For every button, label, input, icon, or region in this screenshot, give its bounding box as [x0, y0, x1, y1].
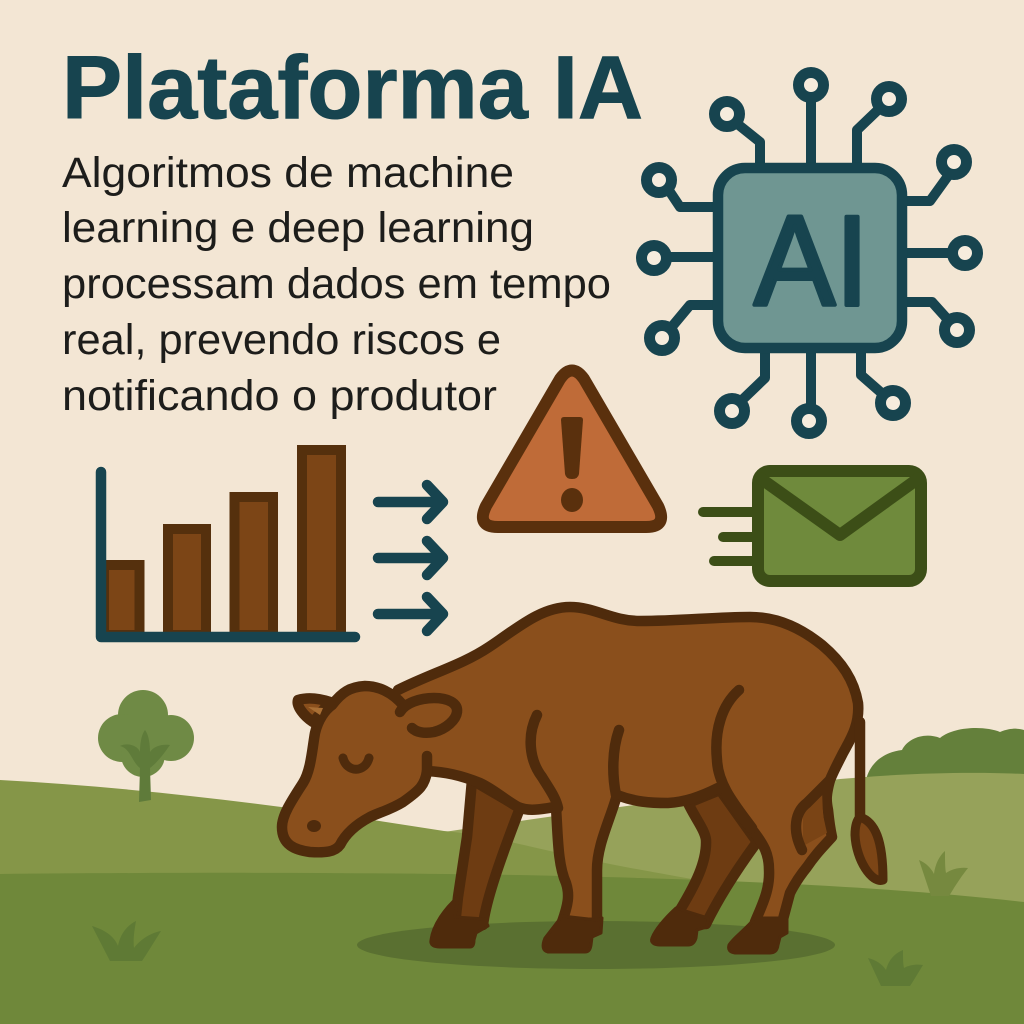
- envelope flap: [760, 478, 919, 535]
- grass tuft: bottom right: [868, 950, 923, 986]
- grass tuft: bottom left: [92, 921, 161, 961]
- cow body and head: [282, 607, 858, 923]
- description text: [62, 149, 611, 420]
- chip circuit nodes: [642, 72, 978, 434]
- olive hill left: [0, 780, 760, 920]
- chart axes: [101, 472, 355, 637]
- hind leg dark patch: [803, 790, 827, 846]
- tail: [855, 722, 865, 816]
- far hind leg: [674, 790, 757, 924]
- ground: [0, 873, 1024, 1024]
- bar chart: [101, 450, 355, 637]
- arrow middle: [378, 541, 443, 575]
- description text: notificando o produtor: [62, 372, 497, 420]
- envelope body: [758, 471, 921, 581]
- description text: processam dados em tempo: [62, 260, 611, 308]
- description text: learning e deep learning: [62, 204, 534, 252]
- triangle: [483, 370, 661, 527]
- far hind hoof: [652, 908, 708, 945]
- near front hoof: [543, 916, 602, 952]
- grass tuft: right hill: [919, 851, 968, 896]
- left ear: [298, 698, 330, 722]
- bars: [104, 450, 341, 635]
- chip body: [718, 168, 902, 348]
- nostril: [307, 820, 321, 832]
- description text: Algoritmos de machine: [62, 149, 514, 197]
- near hind hoof: [729, 918, 787, 953]
- icon: envelope: [703, 471, 921, 581]
- speed lines: [703, 512, 755, 561]
- chip circuit traces: [666, 97, 953, 409]
- arrows: [378, 485, 443, 631]
- far front hoof: [431, 897, 488, 947]
- tree: [98, 690, 194, 802]
- title: Plataforma IA: [62, 37, 643, 137]
- exclamation bar: [561, 417, 583, 479]
- far front leg: [455, 780, 520, 925]
- tree crown: [98, 690, 194, 777]
- icon: AI chip: [642, 72, 978, 434]
- light hill right: [444, 773, 1024, 920]
- inner left ear: [308, 707, 323, 715]
- exclamation dot: [561, 488, 583, 512]
- body contour lines: [427, 690, 830, 850]
- description text: real, prevendo riscos e: [62, 316, 501, 364]
- arrow top: [378, 485, 443, 519]
- back bushes right: [866, 728, 1024, 790]
- landscape: hills and ground: [0, 728, 1024, 1024]
- cow: [282, 607, 883, 953]
- icon: warning triangle: [483, 370, 661, 527]
- arrow bottom: [378, 597, 443, 631]
- tail tuft: [855, 817, 883, 880]
- eye: [343, 758, 369, 769]
- right ear: [400, 698, 457, 733]
- tree trunk and branches: [120, 730, 170, 802]
- chip label: AI: [754, 190, 869, 333]
- cow shadow: [357, 921, 835, 969]
